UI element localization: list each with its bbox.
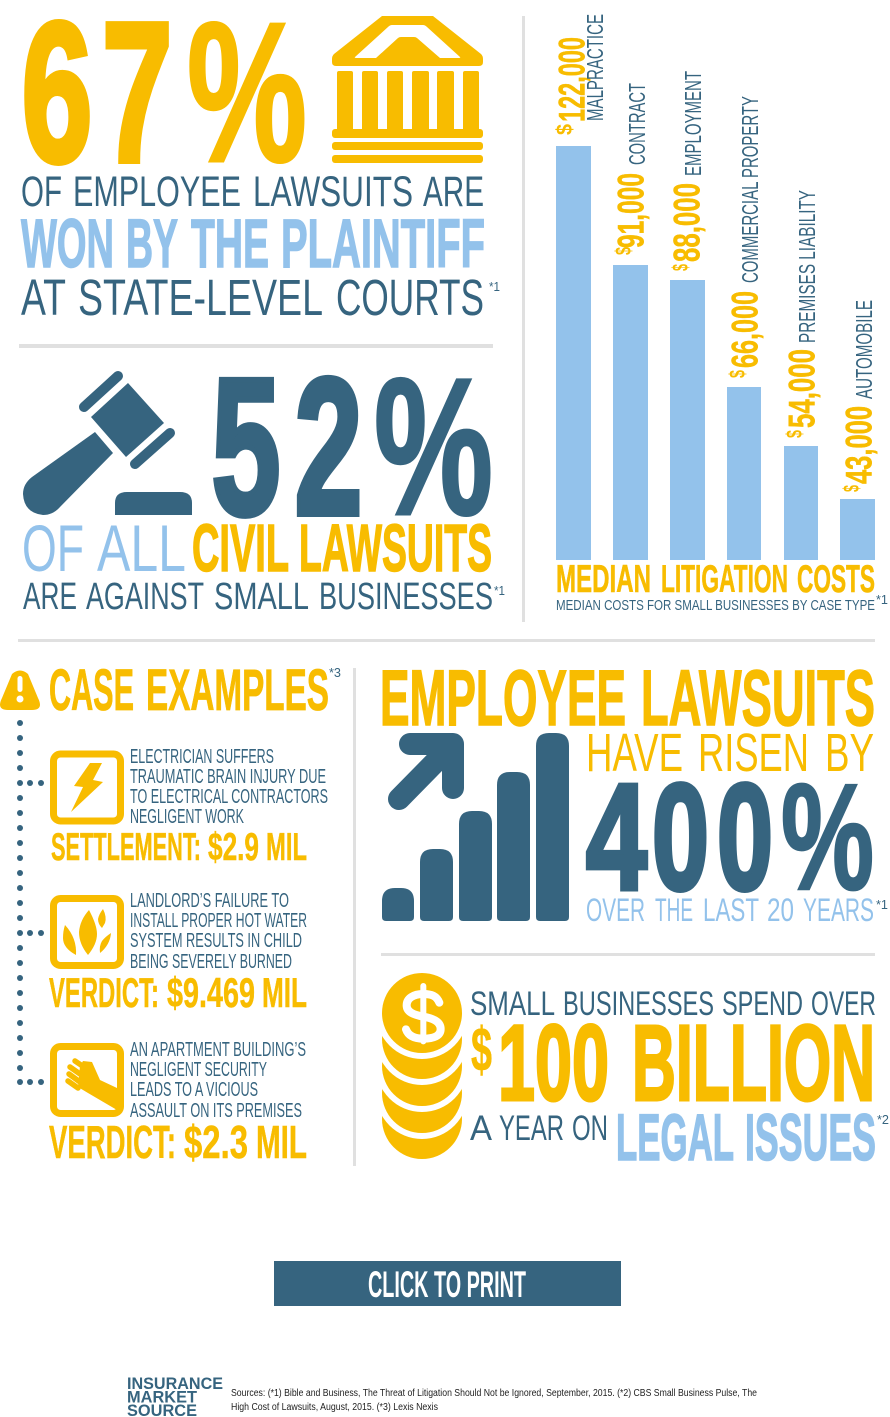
text: over the last 20 years xyxy=(586,892,874,928)
panel: median litigation costs bar chart xyxy=(552,14,888,614)
text: a year on: ON xyxy=(572,1109,608,1148)
case description: TO ELECTRICAL CONTRACTORS xyxy=(130,786,328,808)
icon: flames xyxy=(54,898,120,966)
case description: LEADS TO A VICIOUS xyxy=(130,1079,258,1101)
panel: employee lawsuits risen 400 percent xyxy=(380,653,888,928)
text: a year on: YEAR xyxy=(499,1109,564,1148)
text: of employee lawsuits are: LAWSUITS xyxy=(253,168,413,216)
text: have risen by xyxy=(586,723,874,783)
bar: employment: $ xyxy=(668,264,693,271)
verdict amount: VERDICT: xyxy=(49,969,159,1016)
dollar sign: $ xyxy=(471,1016,492,1085)
case description: NEGLIGENT WORK xyxy=(130,806,244,828)
panel: 52 percent civil lawsuits xyxy=(22,338,505,618)
text: civil lawsuits: LAWSUITS xyxy=(299,511,492,586)
bar: employment: EMPLOYMENT xyxy=(680,71,706,176)
text: civil lawsuits xyxy=(192,511,492,586)
icon: lightning bolt xyxy=(54,754,120,821)
settlement amount: SETTLEMENT: xyxy=(51,826,201,869)
text: have risen by: RISEN xyxy=(698,723,809,783)
logo: insurance market source: INSURANCE xyxy=(127,1374,223,1393)
bar: automobile xyxy=(838,300,880,560)
case description: TRAUMATIC BRAIN INJURY DUE xyxy=(130,766,326,788)
case description: ELECTRICIAN SUFFERS xyxy=(130,746,274,768)
chart title: MEDIAN xyxy=(556,558,651,601)
big stat: 52%: % xyxy=(374,338,493,556)
icon: coin stack xyxy=(376,967,468,1159)
logo: insurance market source xyxy=(127,1374,223,1417)
bar: employment: 88,000 xyxy=(666,183,708,262)
text: of employee lawsuits are: EMPLOYEE xyxy=(73,168,241,216)
big stat: 400% xyxy=(586,752,874,921)
bar: commercial property: COMMERCIAL PROPERTY xyxy=(737,96,763,283)
big stat: 400%: 0 xyxy=(652,752,709,921)
footnote marker: *2 xyxy=(877,1112,889,1127)
bar: automobile: AUTOMOBILE xyxy=(851,300,877,399)
text: have risen by: HAVE xyxy=(586,723,683,783)
text: are against small businesses: AGAINST xyxy=(86,576,204,618)
sources text xyxy=(231,1388,757,1413)
text: legal issues: LEGAL xyxy=(616,1100,734,1174)
case description: INSTALL PROPER HOT WATER xyxy=(130,910,307,932)
bar: employment xyxy=(666,71,708,560)
footnote marker: *1 xyxy=(489,279,500,294)
bar: contract: 91,000 xyxy=(610,173,652,248)
heading: case examples: CASE xyxy=(49,658,134,723)
settlement amount: $2.9 xyxy=(208,826,259,869)
button: click to print xyxy=(274,1261,621,1306)
button: click to print: CLICK TO PRINT xyxy=(368,1264,526,1305)
case description: NEGLIGENT SECURITY xyxy=(130,1059,267,1081)
icon: gavel xyxy=(23,376,192,515)
text: won by the plaintiff: THE xyxy=(191,205,269,282)
bar: premises liability: PREMISES LIABILITY xyxy=(794,190,820,343)
verdict amount: MIL xyxy=(262,969,307,1016)
big stat: 400%: 0 xyxy=(717,752,773,921)
text: over the last 20 years: THE xyxy=(655,892,693,928)
text: of employee lawsuits are: OF xyxy=(21,168,62,216)
bar: commercial property: 66,000 xyxy=(724,291,766,368)
bar: premises liability xyxy=(782,190,822,560)
icon: courthouse xyxy=(332,16,483,163)
text: are against small businesses xyxy=(23,576,493,618)
dotted timeline xyxy=(17,720,44,1085)
text: small businesses spend over: BUSINESSES xyxy=(563,985,714,1023)
text: won by the plaintiff xyxy=(21,205,485,282)
chart title xyxy=(556,558,875,601)
text: over the last 20 years: 20 xyxy=(767,892,794,928)
case description: SYSTEM RESULTS IN CHILD xyxy=(130,930,302,952)
verdict amount: MIL xyxy=(256,1116,307,1168)
big stat: 52%: 2 xyxy=(294,338,362,556)
bar: commercial property: $ xyxy=(725,370,750,378)
bar: malpractice xyxy=(552,14,608,560)
text: won by the plaintiff: WON xyxy=(21,205,114,282)
bar: contract: CONTRACT xyxy=(624,83,650,165)
footnote marker: *1 xyxy=(876,897,888,912)
footnote marker: *3 xyxy=(329,665,341,680)
footnote marker: *1 xyxy=(494,583,505,598)
panel: 67 percent won by plaintiff xyxy=(21,0,500,326)
verdict amount: $2.3 xyxy=(184,1116,248,1168)
text: a year on xyxy=(470,1109,608,1148)
sources text: High Cost of Lawsuits, August, 2015. (*3) Lexis Nexis xyxy=(231,1402,438,1413)
case description xyxy=(130,890,307,973)
panel: case examples xyxy=(0,658,341,1168)
text: small businesses spend over: SMALL xyxy=(470,985,555,1023)
big stat: 67% xyxy=(22,0,307,204)
text: of employee lawsuits are: ARE xyxy=(423,168,484,216)
settlement amount: MIL xyxy=(266,826,307,869)
text: won by the plaintiff: BY xyxy=(126,205,178,282)
big stat: 100 billion xyxy=(498,1002,875,1123)
verdict amount: VERDICT: xyxy=(49,1116,176,1168)
big stat: 400%: 4 xyxy=(586,752,647,921)
text: are against small businesses: BUSINESSES xyxy=(319,576,493,618)
text: at state-level courts: COURTS xyxy=(336,269,484,326)
text: a year on: A xyxy=(470,1109,493,1148)
panel: 100 billion on legal issues xyxy=(376,967,889,1174)
logo: insurance market source: MARKET xyxy=(127,1388,198,1406)
bar: contract: $ xyxy=(611,247,636,255)
text: of all: OF xyxy=(22,511,84,585)
verdict amount: $9.469 xyxy=(167,969,255,1016)
bar: contract xyxy=(610,83,652,560)
case 3: apartment building xyxy=(49,1039,307,1168)
text: won by the plaintiff: PLAINTIFF xyxy=(281,205,485,282)
text: of all: ALL xyxy=(97,511,186,585)
text: of all xyxy=(22,511,186,585)
bar: commercial property xyxy=(724,96,766,560)
bar: automobile: 43,000 xyxy=(838,406,880,484)
text: are against small businesses: SMALL xyxy=(214,576,309,618)
text: civil lawsuits: CIVIL xyxy=(192,511,289,586)
big stat: 100 billion: 100 xyxy=(498,1002,609,1123)
bar: malpractice: $ xyxy=(552,124,577,135)
sources text: Sources: (*1) Bible and Business, The Threat of Litigation Should Not be Ignored, September, 2015. (*2) CBS Small Business Pulse, The xyxy=(231,1388,757,1399)
heading: employee lawsuits: EMPLOYEE xyxy=(380,653,626,742)
bar: automobile: $ xyxy=(839,485,864,492)
text: small businesses spend over: SPEND xyxy=(722,985,803,1023)
case 1: electrician xyxy=(51,746,328,869)
case 2: landlord xyxy=(49,890,307,1016)
text: over the last 20 years: LAST xyxy=(703,892,759,928)
case description: LANDLORD’S FAILURE TO xyxy=(130,890,289,912)
case description: ASSAULT ON ITS PREMISES xyxy=(130,1100,302,1122)
text: of employee lawsuits are xyxy=(21,168,484,216)
text: at state-level courts: AT xyxy=(21,269,66,326)
text: small businesses spend over xyxy=(470,985,876,1023)
text: over the last 20 years: OVER xyxy=(586,892,645,928)
icon: fist xyxy=(54,1046,120,1114)
case description xyxy=(130,746,328,828)
heading: case examples: EXAMPLES xyxy=(146,658,329,723)
heading: case examples xyxy=(49,658,329,723)
bar: premises liability: 54,000 xyxy=(782,349,822,428)
case description xyxy=(130,1039,306,1122)
chart title: LITIGATION xyxy=(661,558,788,601)
big stat: 52%: 5 xyxy=(212,338,280,556)
icon: warning triangle xyxy=(0,670,40,710)
text: are against small businesses: ARE xyxy=(23,576,77,618)
text: at state-level courts: STATE-LEVEL xyxy=(78,269,323,326)
footnote marker: *1 xyxy=(876,592,888,607)
big stat: 52% xyxy=(212,338,493,556)
case description: BEING SEVERELY BURNED xyxy=(130,951,292,973)
bar: premises liability: $ xyxy=(782,430,807,438)
icon: rising bars with arrow xyxy=(382,733,569,921)
case description: AN APARTMENT BUILDING’S xyxy=(130,1039,306,1061)
